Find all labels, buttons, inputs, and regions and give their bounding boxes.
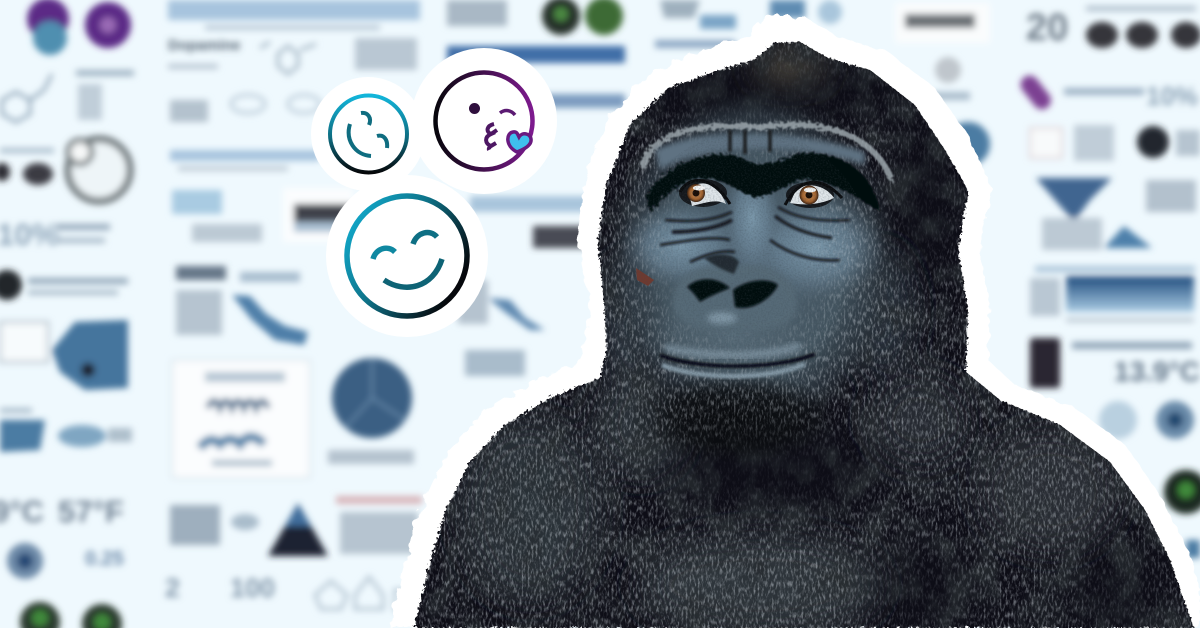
right lower circles: [1099, 401, 1200, 558]
top right of column 3: [660, 0, 700, 18]
chin: [630, 372, 840, 464]
left circles: [7, 543, 124, 628]
gorilla silhouette: [414, 42, 1194, 628]
gradient panel: [283, 188, 353, 242]
blurred infographic background: 13.9°C: [1114, 356, 1200, 387]
emoji: kiss with heart: [411, 48, 557, 194]
right: thermometer: [1030, 338, 1060, 388]
brow ridge: [643, 125, 892, 212]
left cheek light: [620, 201, 744, 289]
left circles: 0.25: [85, 548, 124, 570]
nose bridge: [724, 160, 780, 276]
muzzle: [640, 285, 830, 385]
blue pie circle: [332, 358, 412, 438]
right: gradient bar chart: [1035, 266, 1195, 272]
cheek wound: [636, 268, 654, 286]
column 2 top: [168, 0, 420, 20]
wrinkles: [660, 207, 850, 262]
right: blue wedge graphic: [1036, 178, 1112, 222]
column 4: [895, 3, 990, 43]
gorilla: [400, 30, 1200, 628]
right: dark disc: [1030, 128, 1062, 158]
pyramid: [268, 503, 328, 556]
red-note box: [336, 496, 422, 504]
emoji: big smile: [326, 175, 488, 337]
blurred infographic background: 100: [230, 573, 275, 603]
mouth: [660, 345, 815, 376]
body fur shading: [400, 30, 1200, 628]
column 3: [447, 0, 507, 26]
Mexico map left: [232, 295, 308, 345]
right: purple pill: [1017, 72, 1055, 113]
face grain: [625, 130, 875, 400]
bottom stats: 2: [165, 573, 180, 603]
left column: purple circles and molecule: [2, 0, 134, 122]
left column: dark disc and text: [0, 270, 128, 362]
left water shapes: [0, 408, 132, 452]
left eye: [679, 179, 730, 207]
fur texture overlay: [400, 30, 1200, 628]
white panel with waves: [172, 360, 310, 478]
left column: dark ovals and ring: [0, 139, 130, 201]
head face skin: [602, 87, 902, 464]
white sticker outline around gorilla: [390, 17, 1200, 628]
emoji: winking smile: [311, 77, 425, 191]
right eye: [785, 182, 842, 208]
blurred infographic background: Dopamine: [168, 37, 241, 54]
right cheek light: [745, 196, 885, 300]
blurred infographic background: 57°F: [58, 494, 124, 529]
blurred infographic background: 10%: [1146, 81, 1198, 111]
right column: big 20: 20: [1026, 7, 1068, 49]
blue map blob: [52, 320, 128, 390]
nose: [673, 254, 797, 330]
